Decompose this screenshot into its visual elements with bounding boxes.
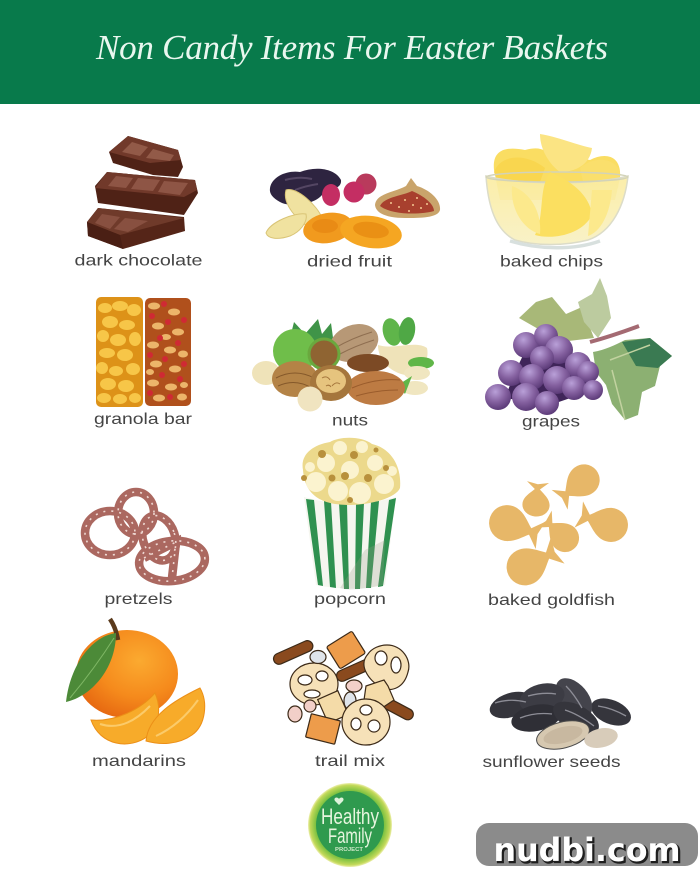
label: dried fruit [307, 254, 393, 270]
item: dark chocolate [74, 136, 203, 270]
icon: chocolate bars [87, 136, 198, 249]
icon: two pretzels [85, 492, 207, 584]
icon: dried fruit [266, 169, 440, 252]
label: nuts [332, 412, 368, 430]
item: baked goldfish [484, 458, 632, 609]
icon: trail mix [272, 631, 415, 745]
item: trail mix [272, 631, 415, 770]
watermark: nudbi.com [494, 831, 680, 869]
label: popcorn [314, 591, 386, 608]
label: sunflower seeds [482, 754, 620, 771]
item: grapes [485, 278, 672, 430]
item: granola bar [94, 297, 193, 428]
item: sunflower seeds [482, 671, 635, 771]
label: dark chocolate [74, 252, 203, 270]
item: dried fruit [266, 169, 440, 270]
icon: mandarin and segments [66, 619, 205, 744]
icon: grape bunch with leaves [485, 278, 672, 420]
label: mandarins [92, 753, 186, 770]
logo: Healthy Family Project [308, 783, 392, 867]
icon: bowl of chips [486, 134, 628, 248]
label: pretzels [104, 591, 172, 608]
watermark: nudbi.com [495, 832, 682, 870]
item: popcorn [301, 438, 400, 608]
icon: granola bars [96, 297, 191, 407]
header band [0, 0, 700, 104]
icon: sunflower seeds [486, 671, 635, 754]
logo: Healthy Family Project: Healthy [321, 804, 379, 829]
icon: goldfish crackers [484, 458, 632, 592]
watermark [476, 823, 698, 870]
icon: popcorn box [301, 438, 400, 589]
label: baked chips [500, 254, 603, 270]
logo: Healthy Family Project: PROJECT [335, 847, 364, 853]
item: baked chips [486, 134, 628, 270]
title: Non Candy Items For Easter Baskets [95, 28, 608, 67]
label: grapes [522, 414, 580, 430]
item: mandarins [66, 619, 205, 770]
label: granola bar [94, 411, 193, 428]
label: baked goldfish [488, 592, 615, 609]
label: trail mix [315, 753, 385, 770]
item: pretzels [85, 492, 207, 608]
logo: Healthy Family Project: Family [328, 825, 372, 848]
item: nuts [252, 316, 434, 430]
icon: nuts pile [252, 316, 434, 412]
icon: heart [334, 798, 344, 805]
